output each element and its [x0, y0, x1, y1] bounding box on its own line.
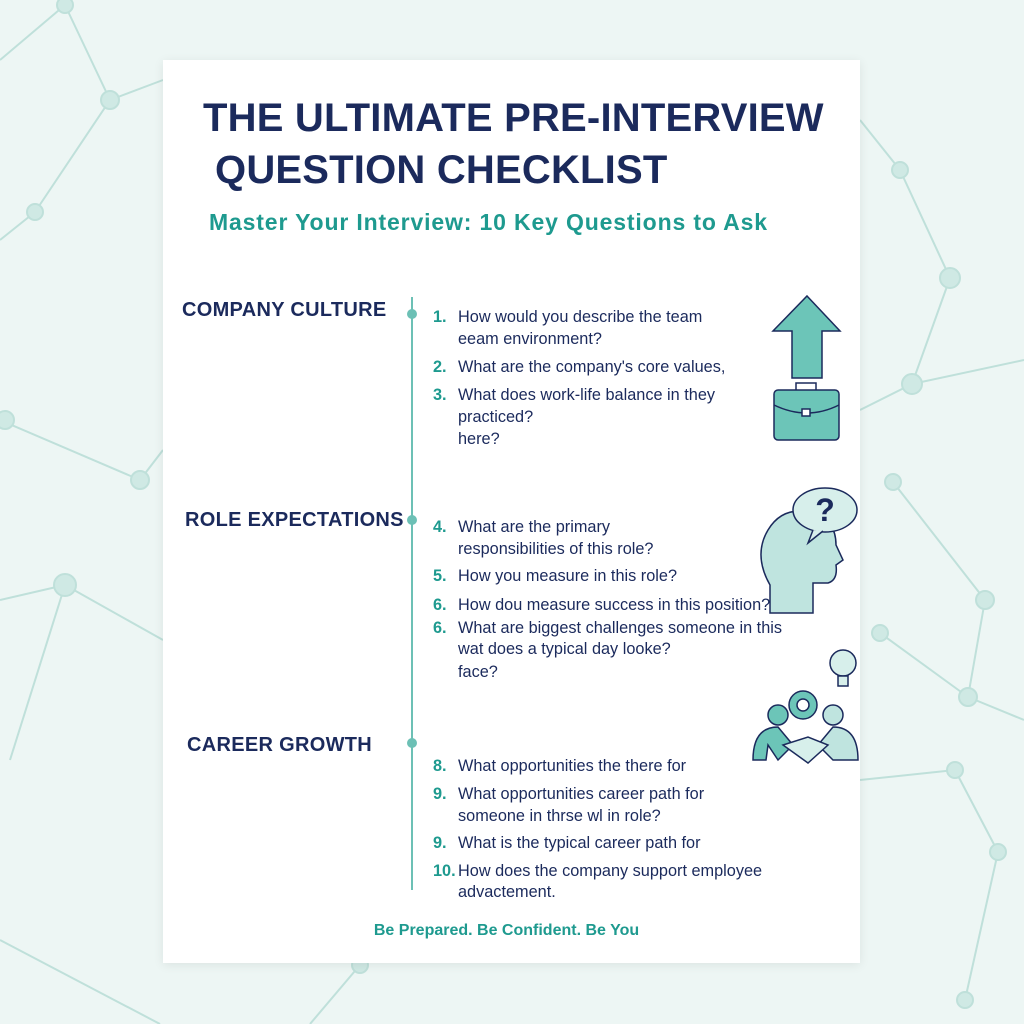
questions list: 6.: [433, 596, 447, 614]
questions list: 5.: [433, 567, 447, 585]
questions list: [433, 308, 782, 901]
questions list: How does the company support employee: [458, 862, 762, 880]
footer: Be Prepared. Be Confident. Be You: [374, 922, 639, 939]
questions list: 4.: [433, 518, 447, 536]
questions list: 8.: [433, 757, 447, 775]
icon: head with question: ?: [815, 492, 835, 528]
questions list: What is the typical career path for: [458, 834, 701, 852]
questions list: here?: [458, 430, 500, 448]
title: QUESTION CHECKLIST: [215, 148, 668, 192]
questions list: How would you describe the team: [458, 308, 702, 326]
questions list: face?: [458, 663, 498, 681]
questions list: What are biggest challenges someone in this: [458, 619, 782, 637]
questions list: 9.: [433, 834, 447, 852]
questions list: 10.: [433, 862, 456, 880]
questions list: What are the primary: [458, 518, 610, 536]
questions list: What opportunities career path for: [458, 785, 704, 803]
questions list: What does work-life balance in they: [458, 386, 715, 404]
subtitle: Master Your Interview: 10 Key Questions to Ask: [209, 209, 768, 235]
icon: arrow and briefcase: [771, 295, 842, 441]
heading: career growth: CAREER GROWTH: [187, 734, 372, 756]
questions list: 1.: [433, 308, 447, 326]
questions list: wat does a typical day looke?: [458, 640, 671, 658]
heading: company culture: COMPANY CULTURE: [182, 299, 386, 321]
questions list: How you measure in this role?: [458, 567, 677, 585]
questions list: 9.: [433, 785, 447, 803]
questions list: 3.: [433, 386, 447, 404]
questions list: advactement.: [458, 883, 556, 901]
title: [203, 96, 824, 192]
questions list: What opportunities the there for: [458, 757, 686, 775]
questions list: What are the company's core values,: [458, 358, 725, 376]
questions list: practiced?: [458, 408, 533, 426]
title: THE ULTIMATE PRE-INTERVIEW: [203, 96, 824, 140]
questions list: How dou measure success in this position?: [458, 596, 770, 614]
questions list: someone in thrse wl in role?: [458, 807, 661, 825]
panel: card: [163, 60, 860, 963]
heading: role expectations: ROLE EXPECTATIONS: [185, 509, 404, 531]
icon: handshake with gear and bulb: [752, 649, 859, 764]
icon: head with question: [760, 487, 858, 614]
questions list: eeam environment?: [458, 330, 602, 348]
questions list: 2.: [433, 358, 447, 376]
timeline: [411, 297, 413, 890]
questions list: responsibilities of this role?: [458, 540, 653, 558]
questions list: 6.: [433, 619, 447, 637]
